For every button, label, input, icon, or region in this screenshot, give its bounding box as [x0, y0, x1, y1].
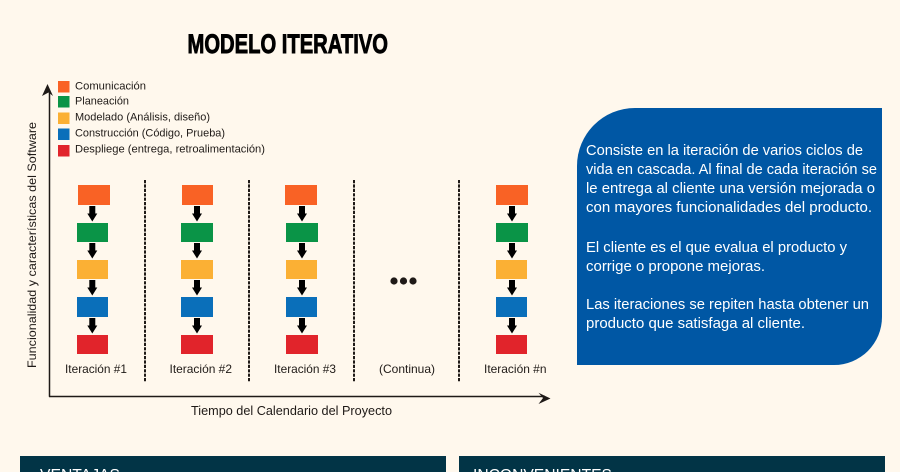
legend	[58, 80, 265, 156]
panel: description: producto que satisfaga al cliente.	[586, 316, 805, 332]
panel: description: Consiste en la iteración de varios ciclos de	[586, 143, 863, 159]
legend: Comunicación	[75, 80, 146, 92]
y axis arrow	[42, 84, 53, 397]
panel: description: El cliente es el que evalua el producto y	[586, 240, 848, 256]
iteration separators	[145, 180, 459, 382]
panel: description: Las iteraciones se repiten hasta obtener un	[586, 297, 869, 313]
panel: description: vida en cascada. Al final de cada iteración se	[586, 162, 877, 178]
x axis arrow	[49, 393, 550, 404]
continuation dots and label	[379, 277, 435, 376]
x axis label: Tiempo del Calendario del Proyecto	[191, 404, 392, 418]
panel: description: corrige o propone mejoras.	[586, 259, 765, 275]
title: MODELO ITERATIVO	[188, 29, 388, 59]
panel: description: le entrega al cliente una versión mejorada o	[586, 181, 875, 197]
iteration 1: Iteración #1	[65, 362, 127, 376]
iteration 3	[274, 185, 336, 376]
panel: ventajas	[20, 456, 446, 472]
y axis label: Funcionalidad y características del Software	[25, 122, 39, 368]
iteration 3: Iteración #3	[274, 362, 336, 376]
legend: Construcción (Código, Prueba)	[75, 128, 225, 140]
iteration n: Iteración #n	[484, 362, 546, 376]
legend: Modelado (Análisis, diseño)	[75, 112, 210, 124]
legend: Planeación	[75, 96, 129, 108]
iteration 1	[65, 185, 127, 376]
iteration 2: Iteración #2	[170, 362, 232, 376]
iteration 2	[170, 185, 232, 376]
panel: description: con mayores funcionalidades del producto.	[586, 200, 872, 216]
continuation dots and label: (Continua)	[379, 362, 435, 376]
iteration n	[484, 185, 546, 376]
panel: inconvenientes	[459, 456, 885, 472]
legend: Despliege (entrega, retroalimentación)	[75, 144, 265, 156]
panel: description	[577, 108, 882, 365]
